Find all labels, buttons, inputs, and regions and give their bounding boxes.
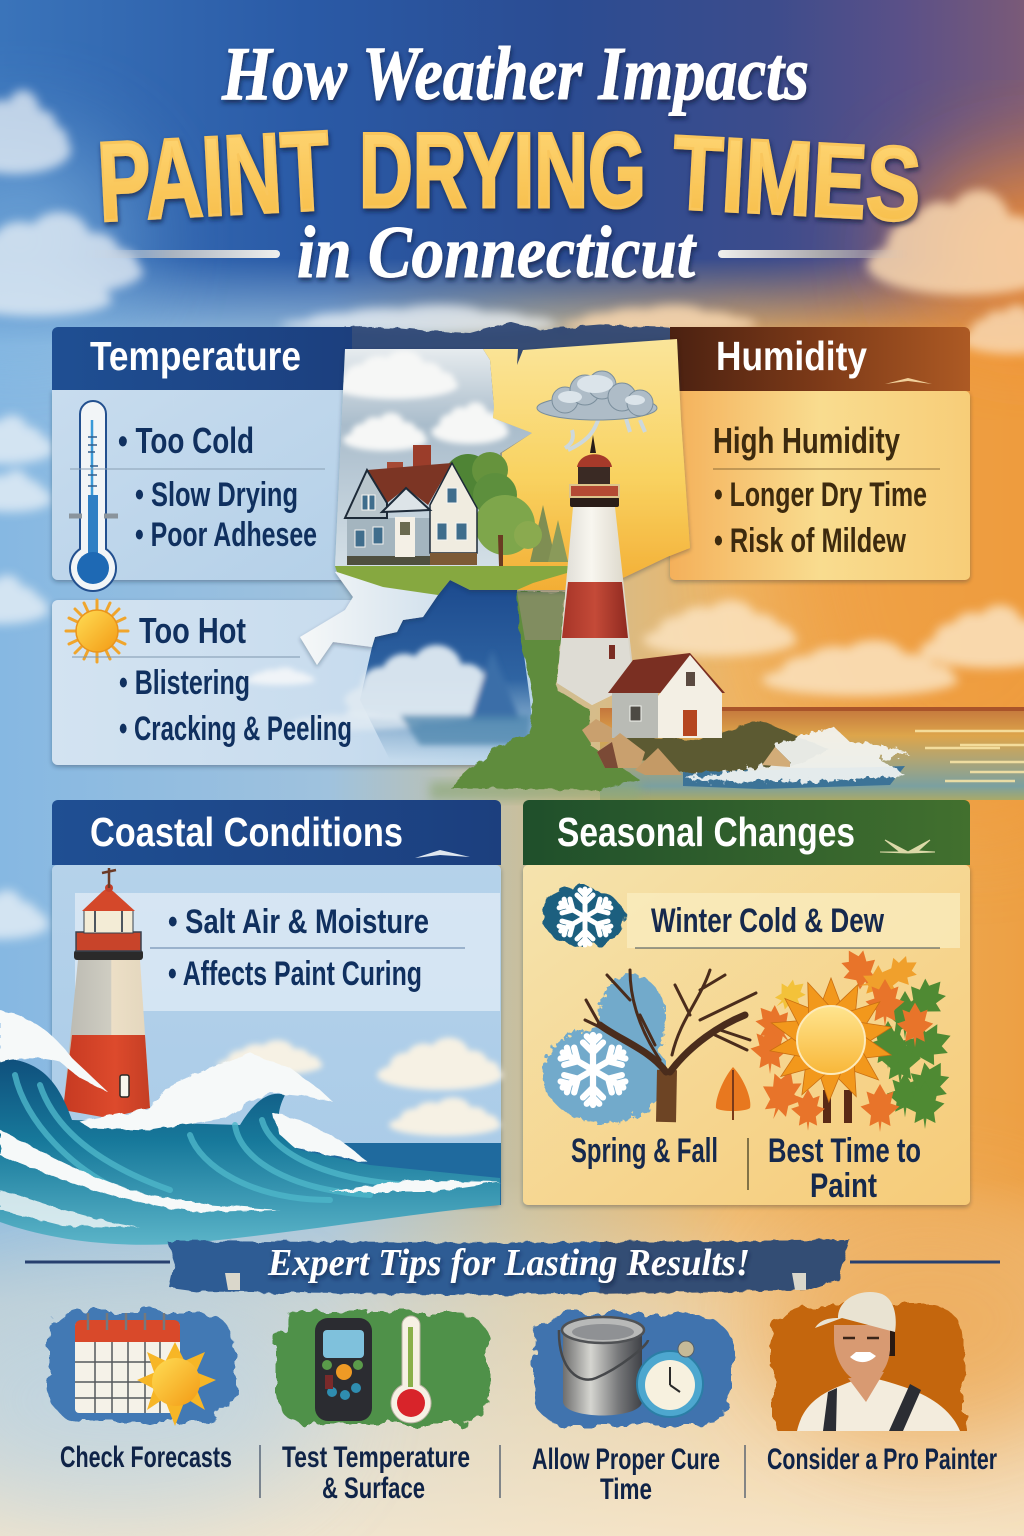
banner: expert tips: Expert Tips for Lasting Results! bbox=[267, 1242, 750, 1284]
icon: calendar bbox=[75, 1313, 180, 1413]
label: check forecasts: Check Forecasts bbox=[60, 1441, 232, 1474]
trees bbox=[444, 452, 568, 566]
text: best time to paint bbox=[768, 1132, 921, 1205]
title side rules bbox=[85, 250, 908, 258]
text: blistering: • Blistering bbox=[119, 664, 250, 702]
icon: shore rocks bbox=[582, 719, 790, 775]
map east half: yellow sky bbox=[483, 339, 690, 590]
header: temperature bbox=[52, 327, 352, 390]
text: winter cold and dew: Winter Cold & Dew bbox=[651, 902, 884, 940]
background clouds bbox=[0, 90, 1024, 939]
title bbox=[85, 32, 924, 294]
foam bbox=[0, 1010, 500, 1228]
illustration: winter blob with snowflake bbox=[543, 975, 667, 1123]
heading: too hot: Too Hot bbox=[139, 610, 246, 651]
icon: sun bbox=[66, 600, 128, 662]
dark blue torn map shadow bbox=[360, 580, 535, 760]
title line: paint drying times bbox=[95, 107, 924, 245]
icon: sun bbox=[137, 1342, 216, 1426]
icon: storm cloud bbox=[537, 371, 657, 450]
icon: breaking wave bbox=[0, 1010, 500, 1245]
tip: test temperature and surface bbox=[276, 1312, 488, 1505]
icon: paint can bbox=[559, 1317, 648, 1416]
label: test temperature and surface bbox=[282, 1441, 470, 1505]
text: too cold: • Too Cold bbox=[118, 420, 254, 461]
header: coastal conditions bbox=[52, 800, 501, 865]
text: slow drying: • Slow Drying bbox=[135, 476, 298, 514]
header: seasonal changes: Seasonal Changes bbox=[557, 809, 855, 855]
torn dark band behind map bbox=[345, 322, 700, 400]
text: spring and fall: Spring & Fall bbox=[571, 1132, 718, 1170]
title line: paint drying times: DRYING bbox=[359, 110, 646, 230]
label: test temperature and surface: Test Temperature bbox=[282, 1441, 470, 1474]
text: best time to paint: Best Time to bbox=[768, 1132, 921, 1170]
label: allow proper cure time: Allow Proper Cure bbox=[532, 1443, 720, 1476]
coastal scene: sunset sea and green hill bbox=[430, 592, 1024, 800]
map clouds bbox=[332, 350, 508, 451]
header: humidity bbox=[670, 327, 970, 391]
icon: stopwatch bbox=[637, 1341, 703, 1417]
panel: too hot bbox=[52, 580, 542, 765]
illustration: sun and leaves bbox=[747, 942, 959, 1132]
text: poor adhesee: • Poor Adhesee bbox=[135, 516, 317, 554]
text: best time to paint: Paint bbox=[810, 1167, 877, 1205]
icon: painter bbox=[797, 1292, 960, 1431]
header: humidity: Humidity bbox=[716, 333, 867, 379]
title line: paint drying times: TIMES bbox=[670, 114, 924, 244]
illustration: bare tree bbox=[585, 970, 756, 1122]
text: cracking and peeling: • Cracking & Peeling bbox=[119, 710, 352, 748]
panel: seasonal changes bbox=[523, 800, 970, 1205]
icon: coastal cottage bbox=[608, 653, 725, 738]
label: allow proper cure time bbox=[532, 1443, 720, 1506]
header: seasonal changes bbox=[523, 800, 970, 865]
header: coastal conditions: Coastal Conditions bbox=[90, 809, 403, 855]
icon: central lighthouse bbox=[557, 435, 633, 705]
icon: house bbox=[345, 445, 477, 565]
text: salt air and moisture: • Salt Air & Moisture bbox=[168, 903, 429, 941]
tip: consider a pro painter bbox=[767, 1292, 997, 1476]
tip: allow proper cure time bbox=[532, 1314, 731, 1506]
tip: check forecasts bbox=[48, 1312, 235, 1474]
text: longer dry time: • Longer Dry Time bbox=[714, 476, 927, 514]
panel: temperature bbox=[52, 327, 352, 591]
panel: coastal conditions bbox=[52, 800, 503, 1205]
map ground bbox=[335, 566, 568, 595]
icon: coastal lighthouse bbox=[63, 868, 150, 1118]
label: test temperature and surface: & Surface bbox=[322, 1472, 425, 1505]
connecticut map bbox=[300, 339, 690, 665]
sea bbox=[52, 1143, 501, 1205]
title line: in connecticut: in Connecticut bbox=[297, 212, 697, 294]
title line: paint drying times: PAINT bbox=[95, 107, 333, 245]
illustration: small autumn tree bbox=[716, 1067, 750, 1120]
icon: moisture meter bbox=[315, 1318, 372, 1421]
header: temperature: Temperature bbox=[90, 333, 301, 379]
heading: high humidity: High Humidity bbox=[713, 420, 900, 461]
map west half: sky bbox=[335, 349, 532, 566]
label: allow proper cure time: Time bbox=[600, 1473, 652, 1506]
title line: how weather impacts: How Weather Impacts bbox=[221, 32, 809, 116]
icon: thermometer bbox=[69, 401, 118, 591]
icon: snowflake badge bbox=[543, 887, 623, 947]
icon: thermometer bbox=[391, 1316, 431, 1423]
clouds in panel bbox=[218, 1038, 503, 1136]
clouds over dark blue bbox=[245, 645, 530, 745]
text: risk of mildew: • Risk of Mildew bbox=[714, 522, 906, 560]
panhandle bbox=[300, 570, 450, 665]
banner: expert tips bbox=[25, 1240, 1000, 1295]
panel: humidity bbox=[670, 327, 970, 580]
text: affects paint curing: • Affects Paint Curing bbox=[168, 955, 422, 993]
